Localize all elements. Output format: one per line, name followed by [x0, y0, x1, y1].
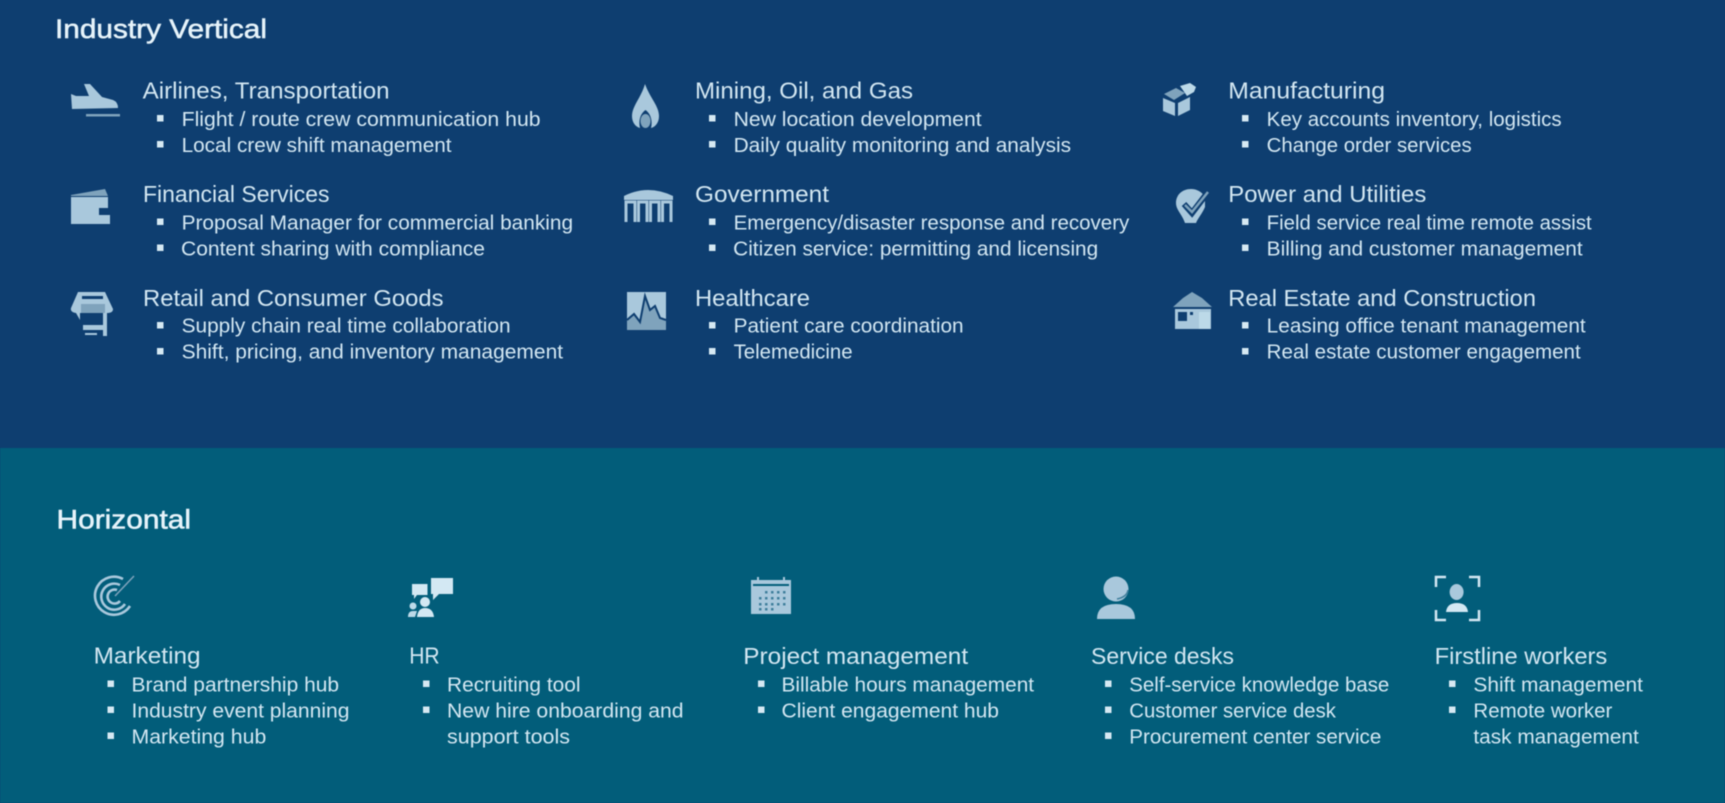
bullet list: manufacturing: Key accounts inventory, logistics: [1267, 109, 1562, 131]
bullet list: government: [709, 212, 1129, 260]
bullet list: financial services: [157, 212, 573, 260]
icon: people chatting: [408, 578, 453, 617]
bullet list: HR: [423, 674, 684, 748]
title: manufacturing: Manufacturing: [1228, 78, 1385, 104]
bullet list: project management: Client engagement hub: [782, 700, 999, 722]
bullet list: retail: Shift, pricing, and inventory management: [182, 342, 564, 364]
bullet list: financial services: Content sharing with compliance: [181, 238, 485, 260]
bullet list: mining: [709, 109, 1071, 157]
bullet list: firstline workers: Shift management: [1473, 674, 1643, 696]
bullet list: service desks: Customer service desk: [1129, 700, 1337, 722]
bullet list: government: Citizen service: permitting and licensing: [733, 238, 1098, 260]
bullet list: power and utilities: Billing and customer management: [1267, 238, 1583, 260]
title: HR: HR: [409, 642, 440, 668]
title: power and utilities: Power and Utilities: [1228, 181, 1426, 207]
item: HR: [408, 578, 684, 748]
bullet list: healthcare: Telemedicine: [734, 342, 853, 364]
title: project management: Project management: [743, 643, 969, 669]
item: marketing: [94, 576, 349, 748]
item: financial services: [71, 181, 573, 260]
bullet list: real estate: Leasing office tenant management: [1267, 316, 1586, 338]
bullet list: mining: Daily quality monitoring and analysis: [734, 135, 1071, 157]
bullet list: manufacturing: [1242, 109, 1562, 157]
bullet list: government: Emergency/disaster response and recovery: [734, 212, 1129, 234]
item: mining: [632, 78, 1071, 157]
item: service desks: [1091, 576, 1389, 748]
icon: airplane: [71, 84, 120, 116]
bullet list: project management: [758, 674, 1035, 722]
bullet list: financial services: Proposal Manager for commercial banking: [182, 212, 573, 234]
bullet list: airlines: [157, 109, 541, 157]
icon: person in focus frame: [1436, 577, 1479, 620]
item: healthcare: [627, 285, 964, 364]
icon: wallet: [71, 189, 110, 224]
bullet list: firstline workers: Remote worker: [1473, 700, 1613, 722]
item: power and utilities: [1176, 181, 1592, 260]
item: firstline workers: [1435, 577, 1643, 748]
bullet list: firstline workers: task management: [1473, 726, 1639, 748]
bullet list: firstline workers: [1449, 674, 1643, 748]
bullet list: service desks: [1105, 674, 1389, 748]
bullet list: power and utilities: [1242, 212, 1592, 260]
bullet list: service desks: Procurement center service: [1129, 726, 1381, 748]
bullet list: marketing: Marketing hub: [132, 726, 266, 748]
icon: calendar: [751, 577, 791, 614]
bullet list: marketing: Industry event planning: [132, 700, 350, 722]
bullet list: manufacturing: Change order services: [1267, 135, 1472, 157]
panel: industry vertical: [0, 0, 1725, 448]
title: service desks: Service desks: [1091, 643, 1234, 669]
title: government: Government: [695, 181, 829, 207]
title: airlines: Airlines, Transportation: [143, 78, 390, 104]
title: marketing: Marketing: [94, 642, 201, 668]
icon: pin with check mark: [1176, 189, 1208, 223]
bullet list: retail: Supply chain real time collaboration: [182, 316, 511, 338]
item: airlines: [71, 78, 541, 157]
title: healthcare: Healthcare: [695, 285, 810, 311]
title: mining: Mining, Oil, and Gas: [695, 78, 913, 104]
bullet list: healthcare: Patient care coordination: [734, 316, 964, 338]
icon: retail store: [71, 292, 113, 336]
bullet list: retail: [157, 316, 564, 364]
title: real estate: Real Estate and Construction: [1228, 285, 1536, 311]
title: firstline workers: Firstline workers: [1435, 643, 1607, 669]
bullet list: HR: Recruiting tool: [447, 674, 580, 696]
item: government: [624, 181, 1129, 260]
bullet list: power and utilities: Field service real time remote assist: [1267, 212, 1592, 234]
panel: horizontal: [0, 448, 1725, 803]
bullet list: real estate: Real estate customer engagement: [1267, 342, 1581, 364]
icon: government building: [624, 190, 673, 222]
icon: flame: [632, 84, 659, 128]
bullet list: airlines: Flight / route crew communication hub: [182, 109, 541, 131]
title: financial services: Financial Services: [143, 181, 330, 207]
bullet list: HR: support tools: [447, 726, 570, 748]
item: project management: [743, 577, 1035, 722]
icon: open box: [1163, 83, 1196, 116]
icon: house: [1173, 292, 1212, 329]
bullet list: real estate: [1242, 316, 1586, 364]
bullet list: project management: Billable hours management: [782, 674, 1035, 696]
item: real estate: [1173, 285, 1586, 364]
icon: support agent: [1097, 576, 1135, 619]
icon: target: [95, 576, 134, 615]
item: manufacturing: [1163, 78, 1562, 157]
bullet list: marketing: [108, 674, 350, 748]
heading: Horizontal: Horizontal: [56, 504, 191, 534]
bullet list: mining: New location development: [734, 109, 982, 131]
bullet list: service desks: Self-service knowledge base: [1129, 674, 1389, 696]
item: retail: [71, 285, 564, 364]
heading: Industry Vertical: Industry Vertical: [55, 14, 267, 44]
icon: health chart: [627, 292, 666, 330]
bullet list: HR: New hire onboarding and: [447, 700, 684, 722]
bullet list: healthcare: [709, 316, 964, 364]
bullet list: marketing: Brand partnership hub: [132, 674, 339, 696]
bullet list: airlines: Local crew shift management: [182, 135, 452, 157]
title: retail: Retail and Consumer Goods: [143, 285, 444, 311]
